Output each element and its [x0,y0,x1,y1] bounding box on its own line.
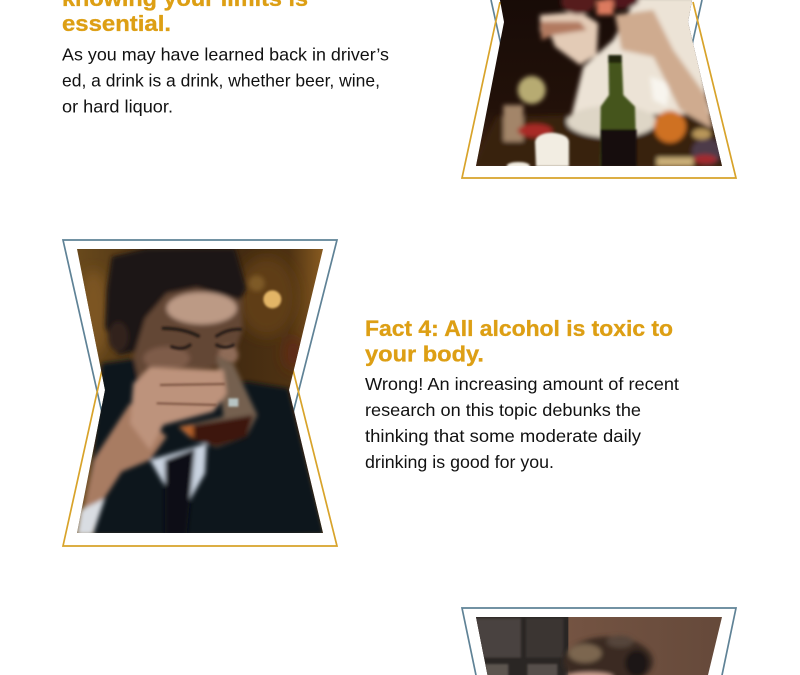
heading: fact 4 [365,316,673,366]
body text: fact 4: Wrong! An increasing amount of recent [365,374,679,394]
body text: fact 4: thinking that some moderate daily [365,426,641,446]
body text: fact 3: As you may have learned back in driver’s [62,44,389,64]
heading: fact 4: your body. [365,342,484,366]
heading: fact 4: Fact 4: All alcohol is toxic to [365,316,673,341]
body text: fact 4: research on this topic debunks the [365,400,641,420]
body text: fact 4 [365,374,679,472]
body text: fact 3: or hard liquor. [62,96,173,116]
frame: fact 5 outline [462,608,736,675]
frame: fact 3 hourglass outline [462,0,736,178]
photo: couple toasting with wine [470,0,730,170]
heading: fact 3: essential. [62,11,171,36]
photo: curly-haired man [473,615,727,675]
body text: fact 4: drinking is good for you. [365,452,554,472]
body text: fact 3 [62,44,389,116]
body text: fact 3: ed, a drink is a drink, whether beer, wine, [62,70,380,90]
photo: man drinking whiskey [73,247,327,537]
frame: fact 4 hourglass outline [63,240,337,546]
heading: fact 3 [62,0,308,36]
